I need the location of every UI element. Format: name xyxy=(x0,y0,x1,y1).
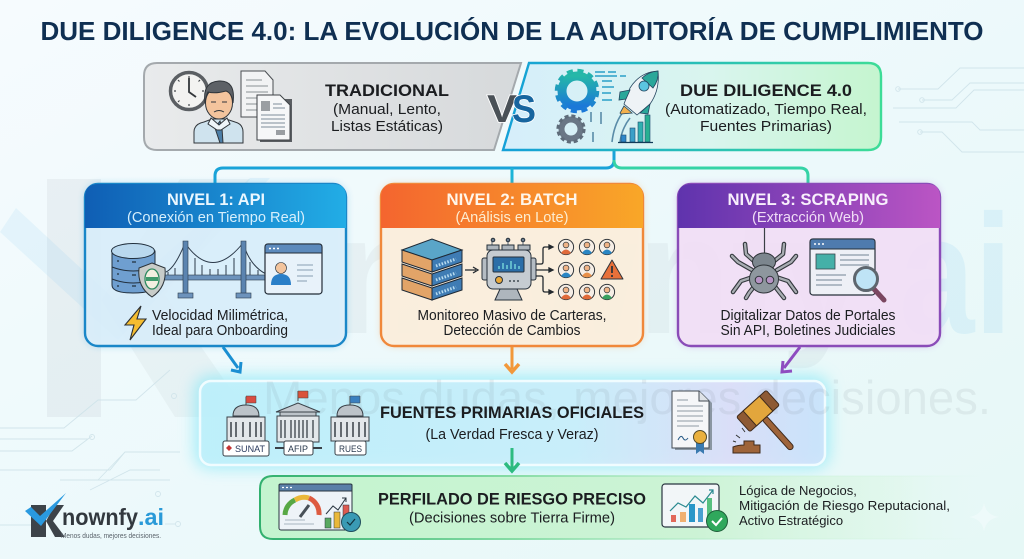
header: nivel 3: (Extracción Web) xyxy=(752,209,864,226)
header: nivel 3 xyxy=(678,184,940,228)
header: nivel 1: NIVEL 1: API xyxy=(167,191,265,209)
text: tradicional: (Manual, Lento, xyxy=(333,101,441,118)
icon: certified document xyxy=(672,391,712,454)
icon: growth chart with check xyxy=(662,484,728,532)
logo: knownfy.ai: Menos dudas, mejores decisiones. xyxy=(61,531,161,540)
logo: knownfy.ai: nownfy xyxy=(62,504,138,530)
icon: rocket xyxy=(619,71,658,115)
text: due diligence xyxy=(665,82,867,135)
VS badge: V xyxy=(487,88,517,131)
arrow: nivel 1 to fuentes xyxy=(223,347,241,372)
icon: AFIP building: AFIP xyxy=(288,444,308,455)
text: due diligence: Fuentes Primarias) xyxy=(700,118,832,135)
panel: nivel 3 scraping xyxy=(678,184,940,346)
text: tradicional: Listas Estáticas) xyxy=(331,118,443,135)
header: nivel 2: (Análisis en Lote) xyxy=(456,209,568,226)
header: nivel 2: NIVEL 2: BATCH xyxy=(446,191,578,209)
text: nivel 3 xyxy=(720,308,896,339)
text: perfilado benefits: Mitigación de Riesgo Reputacional, xyxy=(739,498,950,513)
text: perfilado benefits: Activo Estratégico xyxy=(739,513,843,528)
arrow: fuentes to perfilado xyxy=(505,448,519,471)
header: nivel 3: NIVEL 3: SCRAPING xyxy=(728,191,888,209)
icon: growth bars xyxy=(618,115,653,142)
icon: SUNAT building xyxy=(223,396,269,456)
text: fuentes: (La Verdad Fresca y Veraz) xyxy=(426,427,598,443)
arrow: nivel 2 to fuentes xyxy=(505,347,519,372)
background watermark logo xyxy=(0,178,1012,417)
text: nivel 1: Velocidad Milimétrica, xyxy=(152,308,288,324)
text: due diligence: DUE DILIGENCE 4.0 xyxy=(680,82,852,100)
icon: database xyxy=(112,244,155,293)
text: fuentes xyxy=(380,404,644,443)
panel: perfilado de riesgo preciso xyxy=(260,476,985,539)
icon: documents xyxy=(241,71,292,142)
text: due diligence: (Automatizado, Tiempo Real, xyxy=(665,101,867,118)
text: nivel 2 xyxy=(418,308,606,339)
background watermark logo: nownfy xyxy=(335,180,865,370)
icon: gears xyxy=(557,71,597,142)
text: nivel 2: Detección de Cambios xyxy=(444,323,580,339)
icon: tired person xyxy=(194,81,243,143)
arrow: servers to machine xyxy=(465,267,478,273)
text: perfilado xyxy=(378,490,646,526)
sparkle xyxy=(969,503,999,531)
text: perfilado benefits: Lógica de Negocios, xyxy=(739,483,857,498)
icon: data lines xyxy=(591,72,630,142)
icon: lightning xyxy=(125,306,146,340)
icon: RUES building: RUES xyxy=(339,444,362,455)
text: fuentes: FUENTES PRIMARIAS OFICIALES xyxy=(380,404,644,422)
panel: tradicional xyxy=(144,63,521,150)
icon: bridge xyxy=(162,241,267,298)
icon: server stack xyxy=(402,239,462,300)
text: nivel 1 xyxy=(152,308,288,339)
icon: people grid and warning xyxy=(558,239,623,300)
VS badge: S xyxy=(512,88,536,131)
icon: SUNAT building: SUNAT xyxy=(235,444,265,455)
icon: clock xyxy=(170,72,208,110)
panel: due diligence 4.0 xyxy=(503,63,881,150)
title: DUE DILIGENCE 4.0: LA EVOLUCIÓN DE LA AUDITORÍA DE CUMPLIMIENTO xyxy=(40,16,983,46)
header: nivel 1: (Conexión en Tiempo Real) xyxy=(127,209,305,226)
panel: fuentes primarias oficiales xyxy=(195,371,991,468)
icon: gavel xyxy=(733,390,807,462)
header: nivel 1 xyxy=(85,184,346,228)
connector: comparison to levels xyxy=(215,151,808,184)
text: tradicional xyxy=(325,82,449,135)
arrows: machine to people xyxy=(536,245,553,294)
icon: AFIP building xyxy=(275,391,322,455)
logo: knownfy.ai xyxy=(25,493,164,540)
text: perfilado: (Decisiones sobre Tierra Firme) xyxy=(409,510,615,526)
logo: knownfy.ai: .ai xyxy=(138,504,164,530)
arrow: nivel 3 to fuentes xyxy=(782,347,800,372)
background watermark tagline: Menos dudas, mejores decisiones. xyxy=(263,371,991,424)
icon: web page with magnifier xyxy=(810,239,884,300)
text: nivel 3: Digitalizar Datos de Portales xyxy=(720,308,896,324)
panel: nivel 1 API xyxy=(85,184,346,346)
text: perfilado: PERFILADO DE RIESGO PRECISO xyxy=(378,490,646,508)
text: nivel 1: Ideal para Onboarding xyxy=(152,323,288,339)
text: perfilado benefits xyxy=(739,483,950,528)
icon: processing machine xyxy=(482,238,536,300)
text: nivel 3: Sin API, Boletines Judiciales xyxy=(720,323,896,339)
icon: spider xyxy=(732,228,796,298)
icon: user profile window xyxy=(265,244,322,294)
icon: risk dashboard xyxy=(279,484,360,532)
VS badge xyxy=(487,88,536,131)
header: nivel 2 xyxy=(381,184,643,228)
panel: nivel 2 batch xyxy=(381,184,643,346)
icon: RUES building xyxy=(331,396,369,455)
icon: official shield xyxy=(139,263,165,297)
text: tradicional: TRADICIONAL xyxy=(325,82,449,100)
text: nivel 2: Monitoreo Masivo de Carteras, xyxy=(418,308,606,324)
